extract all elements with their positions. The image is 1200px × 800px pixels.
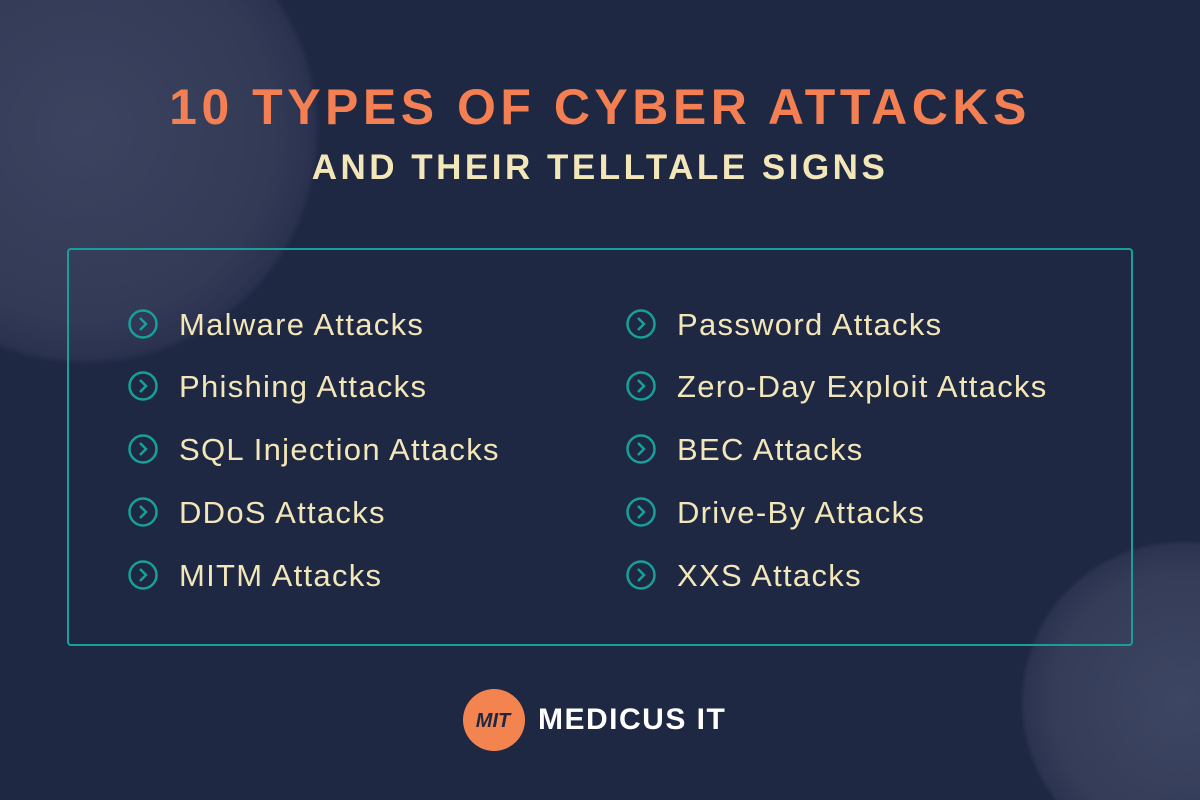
item: Drive-By: Drive-By Attacks [677,495,925,530]
item: XXS: XXS Attacks [677,558,862,593]
icon: MIT circle: MIT [476,710,512,732]
item: MITM: MITM Attacks [179,558,382,593]
logo [463,689,726,751]
panel: attack list [67,248,1133,646]
item: Zero-Day: Zero-Day Exploit Attacks [677,369,1048,404]
item: DDoS: DDoS Attacks [179,495,386,530]
subtitle: AND THEIR TELLTALE SIGNS [312,148,888,187]
item: Phishing: Phishing Attacks [179,369,427,404]
icon: MIT circle [463,689,525,751]
item: Malware: Malware Attacks [179,307,424,342]
brand name: MEDICUS IT [538,703,726,736]
item: SQL: SQL Injection Attacks [179,432,500,467]
item: BEC: BEC Attacks [677,432,864,467]
title: 10 TYPES OF CYBER ATTACKS [169,79,1031,135]
item: Password: Password Attacks [677,307,942,342]
